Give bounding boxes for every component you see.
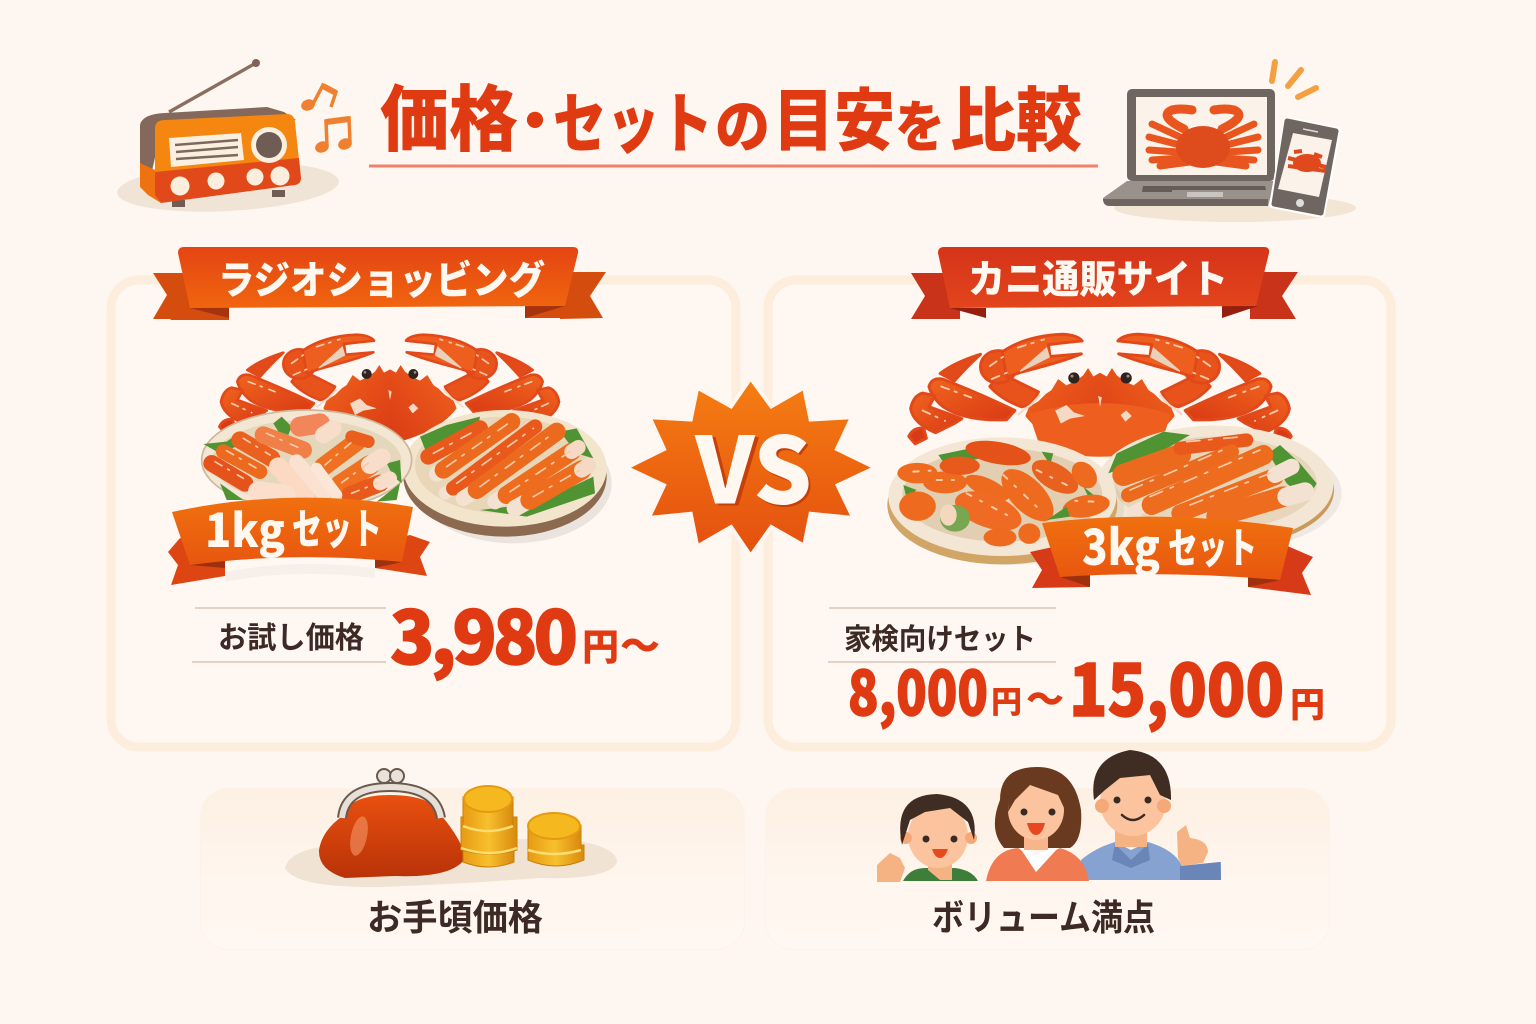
plate with crab legs xyxy=(1096,426,1342,550)
VS burst: VS xyxy=(698,399,814,532)
icon: family of three xyxy=(877,750,1221,882)
icon: radio with music notes xyxy=(116,59,353,217)
plate with crab chunks xyxy=(202,410,412,510)
card: plenty of volume xyxy=(766,750,1330,950)
illustration: 3kg crab and plates xyxy=(909,334,1291,457)
ribbon: 1kg set: 1kg xyxy=(205,495,285,561)
card: affordable price xyxy=(200,769,744,950)
price: family set: 家検向けセット xyxy=(844,616,1036,658)
VS burst xyxy=(631,382,871,552)
panel: radio shopping xyxy=(111,280,736,747)
title: 価格 xyxy=(380,61,518,166)
banner: radio shopping: ラジオショッビング xyxy=(218,250,545,306)
title: セット xyxy=(553,71,713,167)
ribbon: 3kg set xyxy=(1030,509,1313,595)
price: family set: 15,000 xyxy=(1069,635,1284,737)
icon: laptop and smartphone showing crab xyxy=(1103,62,1356,222)
crab xyxy=(219,335,561,444)
price: family set: 円 xyxy=(1290,677,1325,728)
title: 比較 xyxy=(950,65,1082,166)
crab xyxy=(909,334,1291,457)
banner: radio shopping xyxy=(153,247,606,320)
ribbon: 3kg set: 3kg xyxy=(1082,509,1160,580)
title xyxy=(369,61,1098,167)
title: ・ xyxy=(506,75,564,159)
price: family set: 円 xyxy=(991,677,1022,722)
price: trial price: 3,980 xyxy=(390,580,578,686)
plate with crab legs xyxy=(403,410,612,543)
panel: crab mail order site xyxy=(768,280,1391,747)
title: の xyxy=(715,80,770,164)
price: family set xyxy=(828,608,1325,737)
label: お手頃価格 xyxy=(367,889,543,941)
illustration: 1kg crab and plates xyxy=(202,335,612,543)
title: 目安 xyxy=(773,66,895,165)
ribbon: 1kg set xyxy=(168,495,430,585)
plate with crab chunks xyxy=(887,436,1124,565)
price: trial price: 〜 xyxy=(620,614,660,672)
VS burst: VS xyxy=(694,397,812,530)
price: trial price: 円 xyxy=(582,617,619,671)
ribbon: 3kg set: セット xyxy=(1168,515,1257,576)
ribbon: 1kg set: セット xyxy=(292,496,382,557)
price: family set: 〜 xyxy=(1026,669,1064,724)
price: family set: 8,000 xyxy=(848,644,988,733)
title: を xyxy=(895,83,945,164)
price: trial price: お試し価格 xyxy=(218,613,364,657)
plates: chunks and legs xyxy=(887,426,1342,565)
label: ボリューム満点 xyxy=(932,889,1155,941)
price: trial price xyxy=(192,580,660,686)
icon: coin purse and coins xyxy=(285,769,617,887)
banner: crab mail order site: カニ通販サイト xyxy=(968,249,1228,305)
banner: crab mail order site xyxy=(911,247,1298,319)
